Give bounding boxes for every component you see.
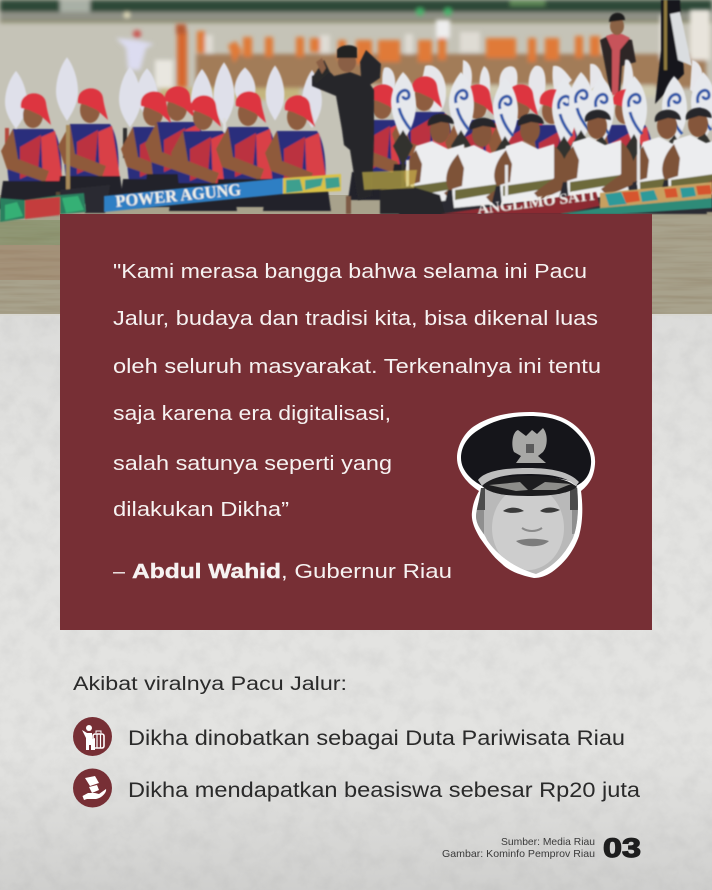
attribution: –: [113, 561, 126, 583]
water: [0, 0, 712, 316]
front rowers in white vests: [362, 108, 712, 222]
quote text: saja karena era digitalisasi,: [113, 403, 391, 425]
quote text: oleh seluruh masyarakat. Terkenalnya ini tentu: [113, 356, 601, 378]
black flag: [655, 0, 692, 104]
source credits: Sumber: Media Riau: [501, 836, 595, 848]
attribution: , Gubernur Riau: [281, 561, 452, 583]
boat name: POWER AGUNG: [115, 180, 242, 211]
far shore and crowd: [0, 0, 712, 23]
panel: quote: [60, 214, 652, 630]
quote text: "Kami merasa bangga bahwa selama ini Pacu: [113, 261, 587, 283]
race photo: [0, 0, 712, 316]
heading: consequences: Akibat viralnya Pacu Jalur:: [73, 674, 347, 695]
source credits: [442, 836, 595, 860]
attribution: [113, 561, 452, 583]
quote text: dilakukan Dikha”: [113, 499, 289, 521]
list item: tourism ambassador: [73, 717, 625, 756]
source credits: Gambar: Kominfo Pemprov Riau: [442, 848, 595, 860]
boat hull: Power Agung: [0, 174, 341, 222]
list item: scholarship: [73, 768, 640, 808]
back row rowers, right: [348, 76, 659, 205]
quote text: Jalur, budaya dan tradisi kita, bisa dikenal luas: [113, 308, 598, 330]
quote text: [113, 261, 601, 521]
swirl paddles: [390, 72, 712, 171]
quote text: salah satunya seperti yang: [113, 453, 392, 475]
attribution: Abdul Wahid: [132, 561, 281, 583]
icon: traveller with suitcase: [73, 717, 112, 756]
boat hull: Panglimo Sati: [440, 182, 712, 218]
icon: hand holding money: [73, 768, 112, 808]
standing man in black: [312, 45, 381, 214]
item text: Dikha mendapatkan beasiswa sebesar Rp20 juta: [128, 779, 640, 802]
portrait sticker: [457, 412, 595, 578]
plain white paddles, back row right: [382, 59, 703, 116]
background boat with orange paddles: [116, 10, 710, 100]
left rowers and paddles: [0, 57, 331, 213]
page number: 03: [603, 833, 641, 863]
standing official behind the paddles: [600, 13, 636, 95]
item text: Dikha dinobatkan sebagai Duta Pariwisata Riau: [128, 727, 625, 750]
boat name: ANGLIMO SATI: [477, 188, 596, 218]
